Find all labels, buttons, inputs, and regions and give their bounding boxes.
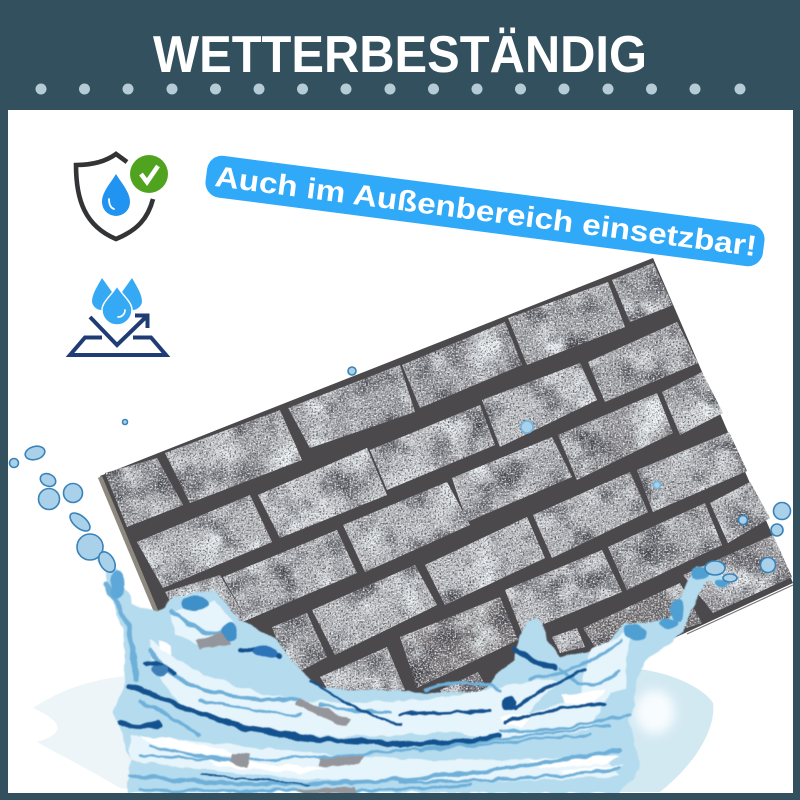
pale highlight areas <box>130 600 630 782</box>
wall edge <box>98 476 158 612</box>
flying water droplets <box>10 367 790 582</box>
right pale water <box>560 668 713 792</box>
photo: brick wall panel <box>10 258 793 793</box>
bricks showing through water <box>195 632 365 793</box>
callout pill: outdoor use: Auch im Außenbereich einsetzbar! <box>213 161 759 263</box>
wall base and mortar <box>100 258 793 695</box>
icon: water repellent surface <box>70 278 166 355</box>
mid blue strokes <box>105 585 630 791</box>
right highlight <box>635 690 675 734</box>
wall lower edge <box>687 585 793 634</box>
white glints <box>140 640 625 775</box>
icon: shield with water drop and check <box>76 154 168 239</box>
dotted divider row <box>36 84 746 94</box>
splash body <box>98 556 730 793</box>
callout pill: outdoor use <box>204 154 766 268</box>
title: WETTERBESTÄNDIG <box>153 26 647 84</box>
bricks with stone texture <box>105 263 792 710</box>
arm detail left <box>110 571 277 676</box>
dark blue streaks <box>120 650 605 785</box>
water reflection ripples <box>33 676 135 790</box>
water splash <box>98 556 730 793</box>
arm detail right <box>624 567 729 641</box>
